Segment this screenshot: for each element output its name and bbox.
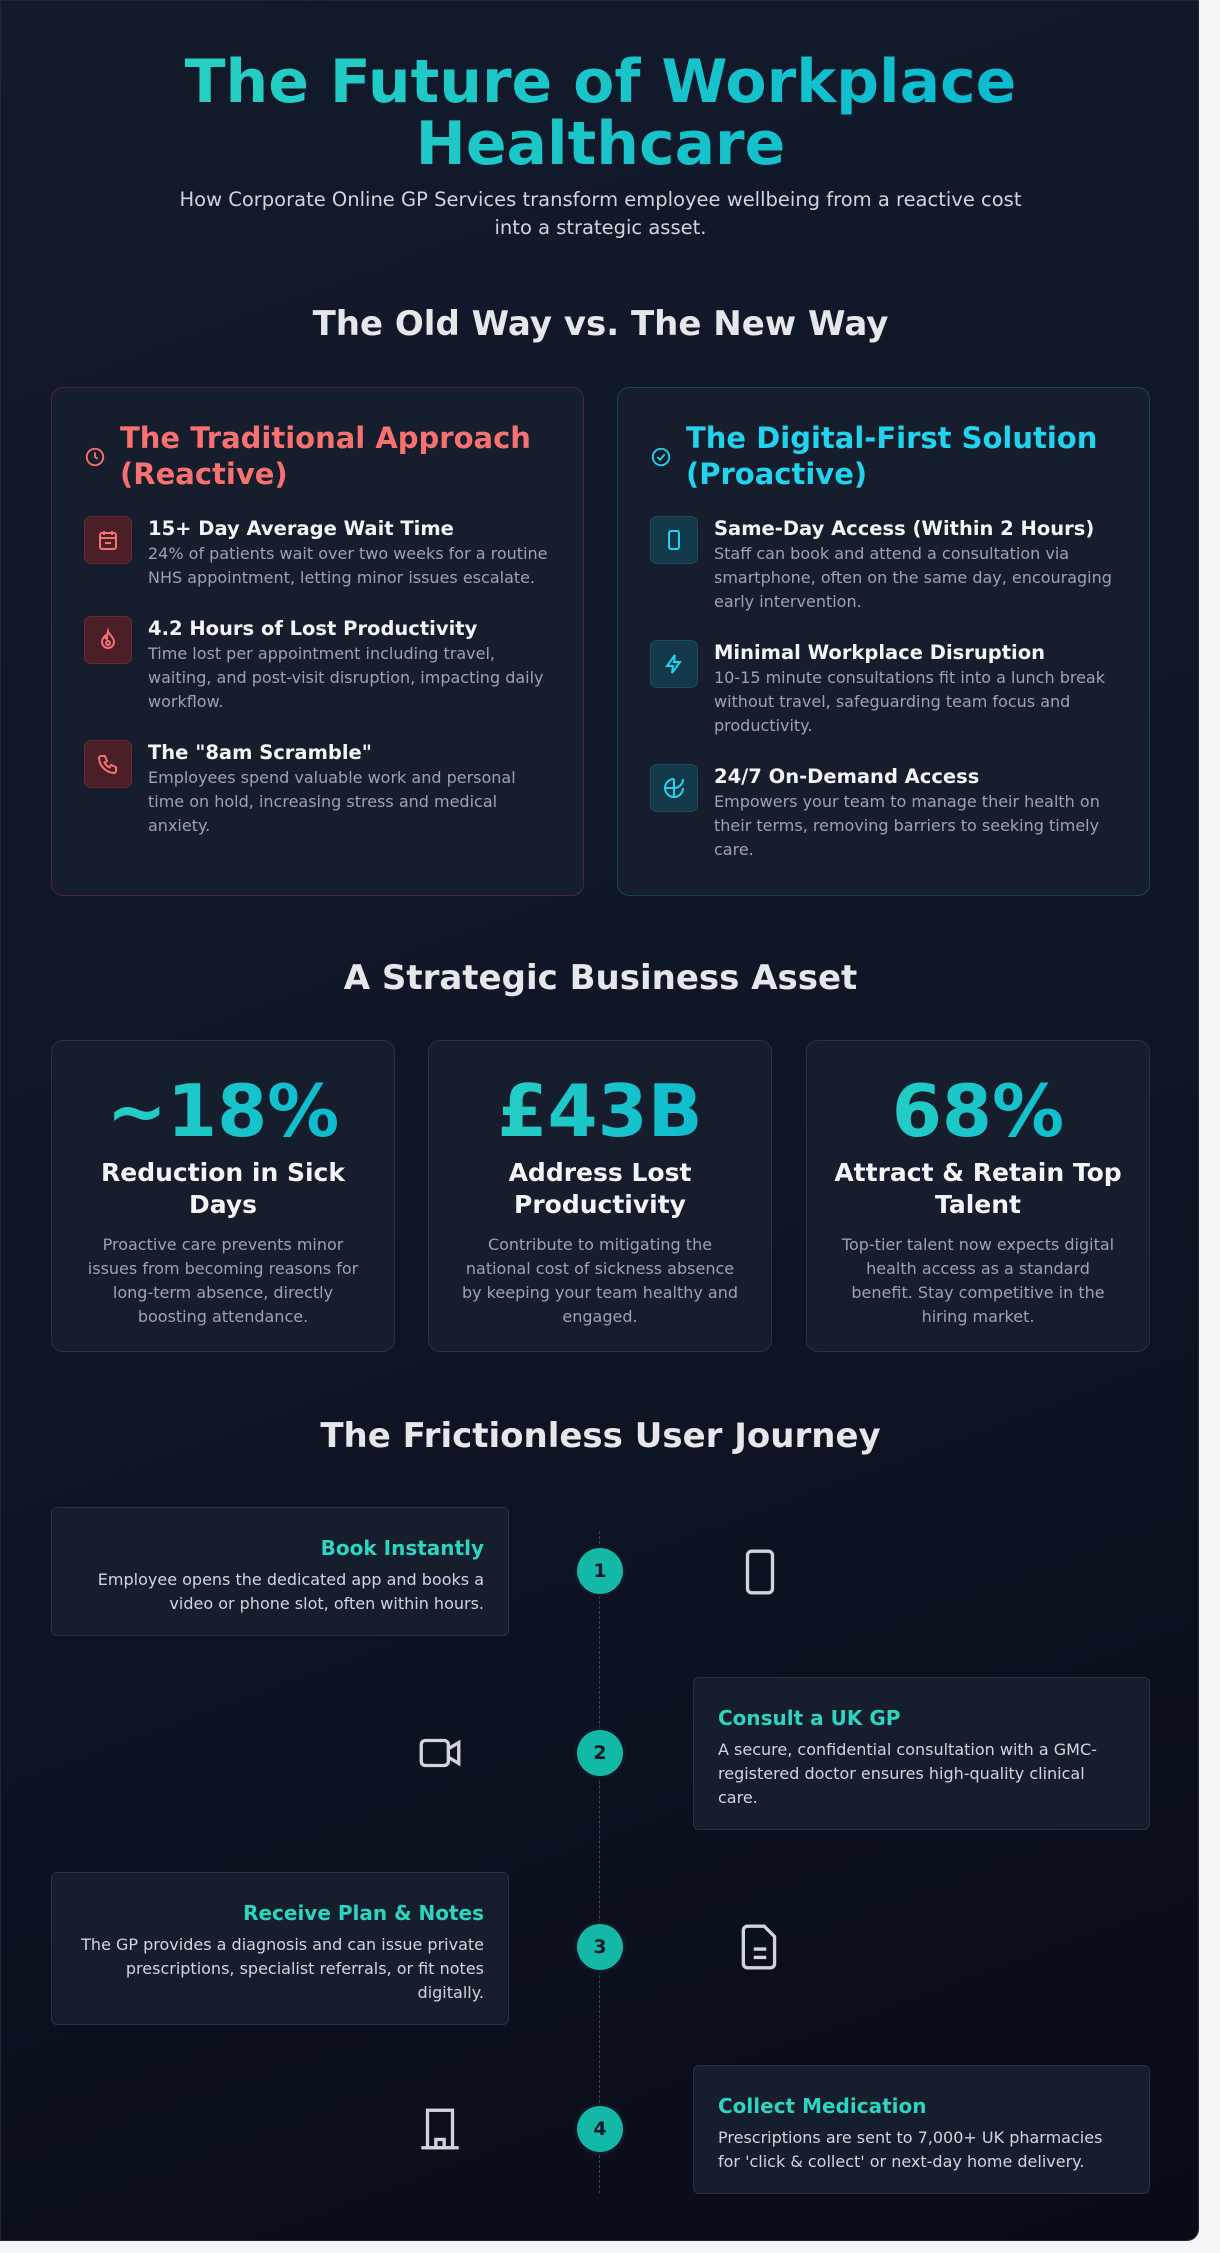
step 1 circle [577, 1548, 623, 1594]
panel heading: traditional: The Traditional Approach (Reactive) [120, 421, 531, 491]
step 3 card: The GP provides a diagnosis and can issue private prescriptions, specialist referrals, or fit notes digitally. [81, 1935, 484, 2002]
stat: 18%: ~18% [107, 1069, 339, 1153]
step 2 card: A secure, confidential consultation with a GMC-registered doctor ensures high-quality clinical care. [718, 1740, 1097, 1807]
item: 24/7: Empowers your team to manage their health on their terms, removing barriers to seeking timely care. [714, 792, 1100, 859]
item: same day: Staff can book and attend a consultation via smartphone, often on the same day, encouraging early intervention. [714, 544, 1112, 611]
stat: 43B: by keeping your team healthy and [462, 1283, 738, 1302]
item: 8am scramble: The "8am Scramble" [148, 741, 372, 764]
panel: digital [617, 387, 1150, 896]
item: 8am scramble [84, 740, 516, 835]
stat: 68% [806, 1040, 1150, 1352]
step 2 circle [577, 1730, 623, 1776]
step 2 card: Consult a UK GP [718, 1706, 900, 1730]
stat: 43B [428, 1040, 772, 1352]
item: 24/7 [650, 764, 1100, 859]
step 1 card: Employee opens the dedicated app and books a video or phone slot, often within hours. [98, 1570, 484, 1613]
step 2 card [693, 1677, 1150, 1830]
icon: video [420, 1738, 460, 1768]
item: lost productivity: 4.2 Hours of Lost Productivity [148, 617, 477, 640]
item: 8am scramble: Employees spend valuable work and personal [148, 768, 516, 787]
stat: 18%: boosting attendance. [138, 1307, 308, 1326]
item: same day: Same-Day Access (Within 2 Hours) [714, 517, 1094, 540]
stat: 68%: benefit. Stay competitive in the [851, 1283, 1105, 1302]
step 2 circle: 2 [593, 1742, 607, 1764]
stat: 43B: Address Lost Productivity [509, 1158, 691, 1219]
stat: 43B: £43B [497, 1069, 703, 1153]
stat: 68%: Attract & Retain Top Talent [834, 1158, 1122, 1219]
stat: 18%: issues from becoming reasons for [88, 1259, 358, 1278]
stat: 68%: health access as a standard [866, 1259, 1090, 1278]
stat: 43B: engaged. [562, 1307, 638, 1326]
subtitle: How Corporate Online GP Services transform employee wellbeing from a reactive cost into a strategic asset. [179, 188, 1022, 239]
heading: strategic asset: A Strategic Business Asset [344, 958, 857, 998]
heading: journey: The Frictionless User Journey [320, 1416, 881, 1456]
item: lost productivity [84, 616, 544, 711]
stat: 68%: Top-tier talent now expects digital [842, 1235, 1114, 1254]
title [1, 51, 1200, 175]
step 3 card: Receive Plan & Notes [243, 1901, 484, 1925]
step 4 card: Collect Medication [718, 2094, 926, 2118]
icon: document [742, 1924, 776, 1970]
item: minimal disruption [650, 640, 1105, 735]
step 3 card [51, 1872, 509, 2025]
stat: 43B: Contribute to mitigating the [488, 1235, 712, 1254]
title: Healthcare [416, 109, 785, 179]
icon: building [421, 2108, 459, 2150]
stat: 68%: hiring market. [922, 1307, 1034, 1326]
item: minimal disruption: Minimal Workplace Disruption [714, 641, 1045, 664]
step 4 circle [577, 2106, 623, 2152]
stat: 18%: Reduction in Sick Days [101, 1158, 345, 1219]
step 1 card: Book Instantly [321, 1536, 484, 1560]
stat: 18% [51, 1040, 395, 1352]
stat: 68%: 68% [892, 1069, 1064, 1153]
step 4 card [693, 2065, 1150, 2194]
item: 24/7: 24/7 On-Demand Access [714, 765, 979, 788]
item: minimal disruption: 10-15 minute consultations fit into a lunch break without travel, safeguarding team focus and productivity. [714, 668, 1105, 735]
step 4 card: Prescriptions are sent to 7,000+ UK pharmacies for 'click & collect' or next-day home delivery. [718, 2128, 1102, 2171]
item: lost productivity: Time lost per appointment including travel, waiting, and post-visit disruption, impacting daily workflow. [148, 644, 544, 711]
item: 8am scramble: time on hold, increasing stress and medical anxiety. [148, 792, 497, 835]
panel heading: digital: The Digital-First Solution (Proactive) [686, 421, 1097, 491]
title: The Future of Workplace [185, 47, 1016, 117]
icon: phone [746, 1550, 774, 1594]
stat: 18%: Proactive care prevents minor [103, 1235, 343, 1254]
item: same day [650, 516, 1112, 611]
item: wait time [84, 516, 548, 587]
item: wait time: 15+ Day Average Wait Time [148, 517, 454, 540]
panel: traditional [51, 387, 584, 896]
item: wait time: 24% of patients wait over two weeks for a routine NHS appointment, letting minor issues escalate. [148, 544, 548, 587]
stat: 18%: long-term absence, directly [113, 1283, 333, 1302]
stat: 43B: national cost of sickness absence [466, 1259, 734, 1278]
step 3 circle [577, 1924, 623, 1970]
step 4 circle: 4 [593, 2118, 607, 2140]
step 1 circle: 1 [593, 1560, 607, 1582]
step 3 circle: 3 [593, 1936, 607, 1958]
step 1 card [51, 1507, 509, 1636]
heading: old vs new: The Old Way vs. The New Way [313, 304, 888, 344]
